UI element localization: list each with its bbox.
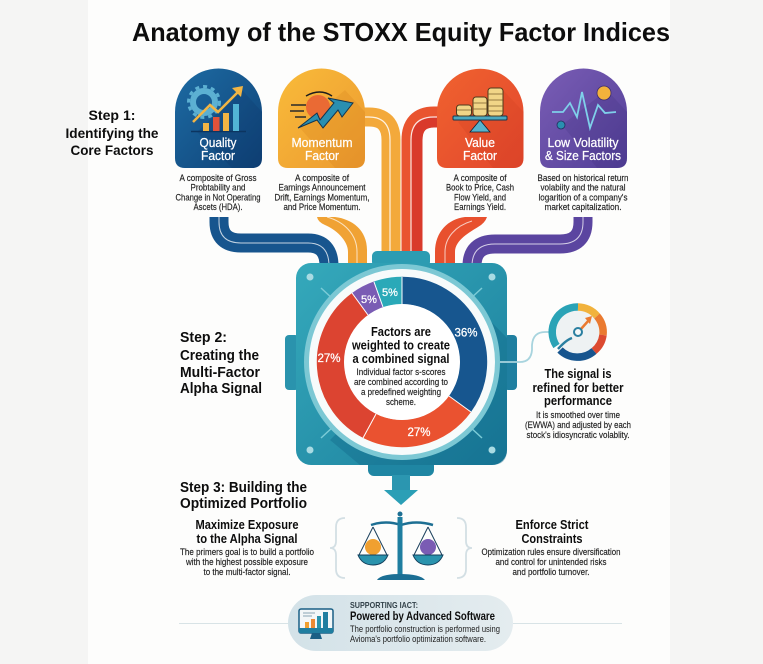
panel: low volatility and size factors: Low Volatility — [548, 135, 619, 150]
text: low volatility description: market capitalization. — [544, 202, 622, 212]
text: low volatility description — [538, 173, 628, 212]
text: value description: A composite of — [454, 173, 507, 183]
panel: hub with weighting donut — [285, 251, 517, 476]
text: quality description — [176, 173, 260, 212]
text: signal refinement heading — [532, 367, 624, 408]
step 1 heading: Identifying the — [66, 125, 159, 141]
text: donut centre description: scheme. — [386, 397, 416, 407]
panel: supporting fact: Powered by Advanced Software — [350, 611, 495, 623]
text: momentum description: Drift, Earnings Momentum, — [274, 192, 370, 202]
text: maximize exposure: to the Alpha Signal — [196, 532, 298, 546]
panel: momentum factor — [278, 69, 365, 168]
pipes connecting factors to the hub — [219, 117, 583, 266]
text: low volatility description: logarition of a company's — [538, 192, 628, 202]
text: momentum description: A composite of — [295, 173, 349, 183]
panel: value factor: Factor — [463, 148, 498, 163]
text: maximize exposure — [180, 518, 314, 577]
step 3 heading — [180, 480, 307, 512]
panel: momentum factor: Momentum — [292, 135, 352, 150]
text: donut centre description — [354, 367, 448, 407]
icon: signal gauge — [500, 307, 603, 362]
panel: momentum factor: Factor — [305, 148, 340, 163]
text: maximize exposure: to the multi-factor signal. — [204, 567, 290, 577]
step 2 heading: Creating the — [180, 348, 259, 364]
step 2 heading: Alpha Signal — [180, 381, 262, 397]
text: value description — [446, 173, 514, 212]
text: signal refinement description: It is smoothed over time — [536, 410, 620, 420]
panel: supporting fact: SUPPORTING IACT: — [350, 600, 418, 610]
text: donut centre heading — [351, 325, 450, 366]
panel: quality factor: Factor — [201, 148, 236, 163]
arrow: hub to portfolio — [384, 475, 418, 505]
text: value description: Flow Yield, and — [454, 192, 506, 202]
text: quality description: Ascets (HDA). — [194, 202, 242, 212]
text: enforce constraints: Constraints — [522, 532, 583, 546]
icon: gear and rising chart — [188, 86, 246, 132]
step 3 heading: Optimized Portfolio — [180, 496, 307, 512]
text: signal refinement heading: refined for better — [532, 381, 624, 395]
panel: supporting fact: Avioma's portfolio optimization software. — [350, 634, 486, 644]
text: value description: Earnings Yield. — [454, 202, 506, 212]
icon: volatility wave — [552, 86, 616, 129]
panel: low volatility and size factors: & Size Factors — [545, 148, 621, 163]
panel: hub with weighting donut: 27% — [317, 353, 341, 365]
text: low volatility description: volabiity and the natural — [540, 182, 626, 192]
text: value description: Book to Price, Cash — [446, 182, 514, 192]
text: maximize exposure: Maximize Exposure — [196, 518, 299, 532]
text: momentum description: Earnings Announcement — [278, 182, 366, 192]
text: quality description: A composite of Gross — [180, 173, 257, 183]
text: momentum description — [274, 173, 370, 212]
text: donut centre description: Individual factor s-scores — [356, 367, 446, 377]
text: maximize exposure: The primers goal is to build a portfolio — [180, 547, 314, 557]
text: quality description: Change in Not Operating — [176, 192, 260, 202]
icon: coin stacks on a balance — [453, 88, 507, 132]
text: enforce constraints: and control for unintended risks — [496, 557, 607, 567]
text: enforce constraints: and portfolio turnover. — [512, 567, 590, 577]
text: signal refinement description: (EWWA) and adjusted by each — [525, 420, 631, 430]
step 1 heading: Core Factors — [70, 142, 154, 158]
text: quality description: Probtability and — [190, 182, 246, 192]
text: signal refinement heading: The signal is — [544, 367, 612, 381]
panel: quality factor — [175, 69, 262, 168]
step 2 heading — [180, 330, 262, 397]
panel: value factor: Value — [465, 135, 495, 150]
text: signal refinement description — [525, 410, 631, 440]
icon: balance scale — [358, 512, 443, 580]
text: momentum description: and Price Momentum. — [284, 202, 360, 212]
text: signal refinement description: stock's idiosyncratic volablity. — [526, 430, 630, 440]
panel: value factor — [437, 69, 524, 168]
step 3 heading: Step 3: Building the — [180, 480, 307, 496]
donut chart — [331, 277, 473, 438]
text: enforce constraints: Optimization rules ensure diversification — [482, 547, 620, 557]
step 1 heading — [66, 107, 159, 158]
text: donut centre heading: weighted to create — [351, 338, 450, 352]
text: enforce constraints — [482, 518, 620, 577]
panel: quality factor: Quality — [200, 135, 237, 150]
text: donut centre heading: Factors are — [371, 325, 431, 339]
panel: hub with weighting donut: 5% — [382, 287, 398, 299]
panel: hub with weighting donut: 36% — [454, 328, 478, 340]
icon: momentum arrow — [290, 92, 353, 128]
text: donut centre heading: a combined signal — [352, 352, 450, 366]
panel: low volatility and size factors — [540, 69, 627, 168]
panel: supporting fact: The portfolio construction is performed using — [350, 624, 500, 634]
title: Anatomy of the STOXX Equity Factor Indices — [132, 17, 670, 47]
braces around the scale — [330, 518, 472, 578]
text: signal refinement heading: performance — [544, 394, 612, 408]
step 1 heading: Step 1: — [88, 107, 136, 123]
text: maximize exposure: with the highest possible exposure — [185, 557, 308, 567]
text: donut centre description: a predefined weighting — [361, 387, 441, 397]
panel: hub with weighting donut: 5% — [361, 294, 377, 306]
step 2 heading: Multi-Factor — [180, 365, 260, 381]
panel: supporting fact — [288, 595, 513, 651]
text: low volatility description: Based on historical return — [538, 173, 628, 183]
text: enforce constraints: Enforce Strict — [516, 518, 589, 532]
icon: monitor with chart — [299, 609, 333, 639]
panel: hub with weighting donut: 27% — [407, 427, 431, 439]
text: donut centre description: are combined according to — [354, 377, 448, 387]
step 2 heading: Step 2: — [180, 330, 227, 346]
